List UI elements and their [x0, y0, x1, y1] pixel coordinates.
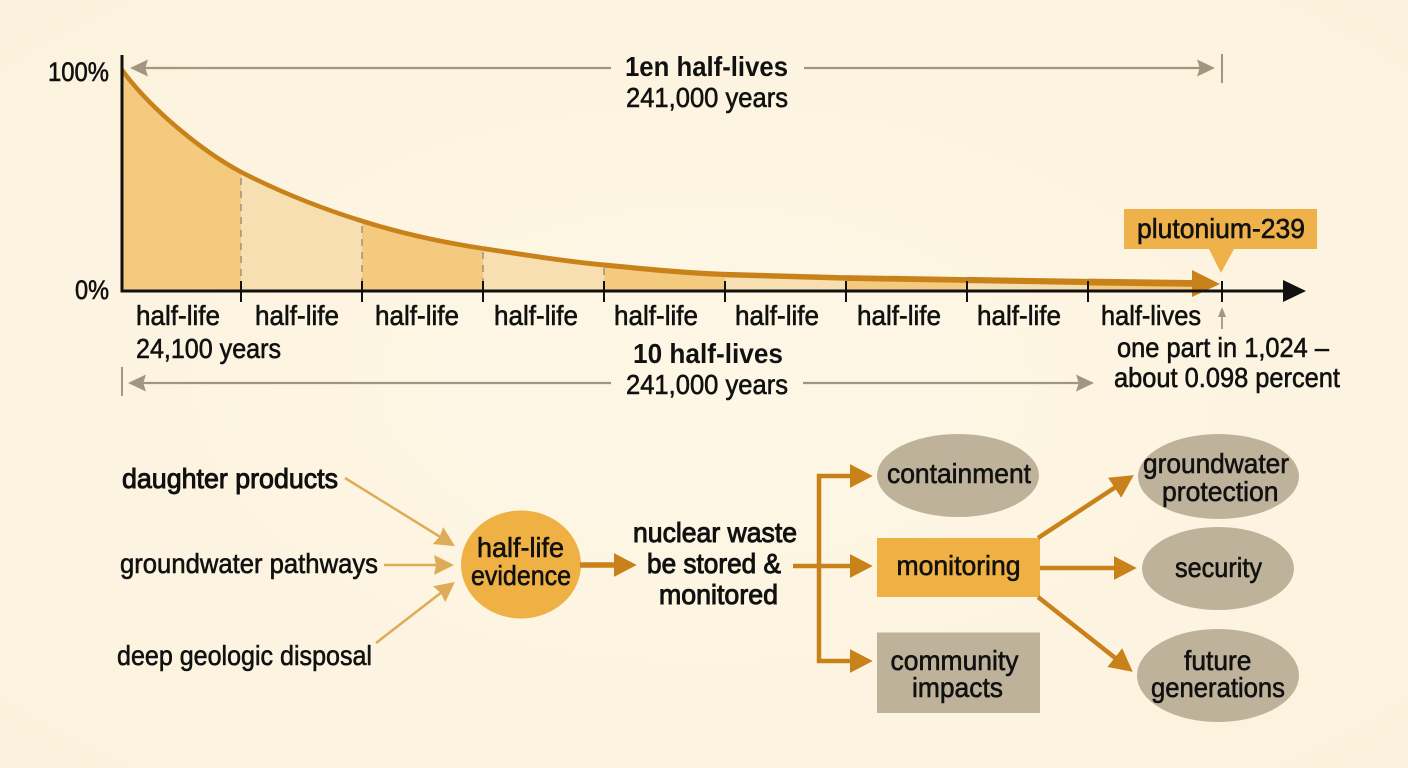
input labels: deep geologic disposal: [117, 640, 372, 671]
input labels: daughter products: [122, 463, 338, 494]
arrow to storage: [580, 562, 631, 568]
half-life labels: [136, 300, 1201, 331]
half-life labels: half-life: [735, 300, 819, 331]
callout: plutonium-239: [1124, 209, 1317, 273]
half-life labels: half-life: [857, 300, 941, 331]
curve arrowhead: [1192, 270, 1220, 297]
fraction note: one part in 1,024 –: [1117, 332, 1329, 363]
branch arrows to responses: [793, 476, 867, 661]
half-life labels: half-life: [255, 300, 339, 331]
outcome arrows: [1038, 478, 1131, 668]
node: containment: [877, 434, 1039, 517]
bottom span: 10 half-lives: 10 half-lives: [633, 338, 783, 369]
node: monitoring: monitoring: [896, 550, 1020, 581]
y axis labels: 0%: [75, 275, 109, 305]
bottom span: 10 half-lives: 241,000 years: [626, 369, 788, 400]
node: groundwater protection: protection: [1162, 476, 1278, 507]
node: community impacts: impacts: [912, 672, 1003, 703]
callout: plutonium-239: plutonium-239: [1137, 213, 1305, 244]
bottom span: 10 half-lives: [122, 338, 1090, 400]
y axis labels: [48, 57, 109, 305]
axes: [122, 55, 1306, 302]
node: community impacts: [877, 632, 1040, 713]
node: half-life evidence: evidence: [471, 560, 571, 591]
node: future generations: generations: [1151, 672, 1285, 703]
top span: ten half-lives: 241,000 years: [626, 82, 788, 113]
half-life labels: half-life: [375, 300, 459, 331]
node: future generations: [1137, 629, 1299, 722]
node: security: [1142, 527, 1294, 610]
text: nuclear waste stored: monitored: [659, 579, 778, 610]
decay chart: [48, 55, 1306, 305]
half-life labels: half-life: [614, 300, 698, 331]
input labels: [117, 463, 378, 671]
node: containment: containment: [887, 458, 1031, 489]
top span: ten half-lives: 1en half-lives: [625, 51, 788, 82]
node: half-life evidence: [461, 510, 581, 618]
half-life labels: half-lives: [1101, 300, 1201, 331]
text: nuclear waste stored: [633, 517, 797, 610]
node: future generations: future: [1184, 645, 1252, 676]
fraction note: about 0.098 percent: [1114, 362, 1340, 393]
node: security: security: [1175, 552, 1262, 583]
half-life labels: half-life: [494, 300, 578, 331]
decay curve: [122, 70, 1198, 284]
fraction note: [1114, 307, 1340, 393]
half-life labels: half-life: [977, 300, 1061, 331]
node: groundwater protection: [1138, 434, 1299, 519]
input labels: groundwater pathways: [120, 548, 378, 579]
node: monitoring: [877, 538, 1040, 597]
half-life duration: 24,100 years: [136, 333, 281, 364]
input arrows: [345, 478, 452, 643]
shaded half-life bands: [122, 70, 1195, 291]
node: community impacts: community: [890, 645, 1018, 676]
text: nuclear waste stored: be stored &: [647, 548, 781, 579]
text: nuclear waste stored: nuclear waste: [633, 517, 797, 548]
top span: ten half-lives: [134, 51, 1222, 113]
node: groundwater protection: groundwater: [1143, 448, 1289, 479]
y axis labels: 100%: [48, 57, 109, 87]
node: half-life evidence: half-life: [477, 532, 564, 563]
half-life labels: half-life: [136, 300, 220, 331]
